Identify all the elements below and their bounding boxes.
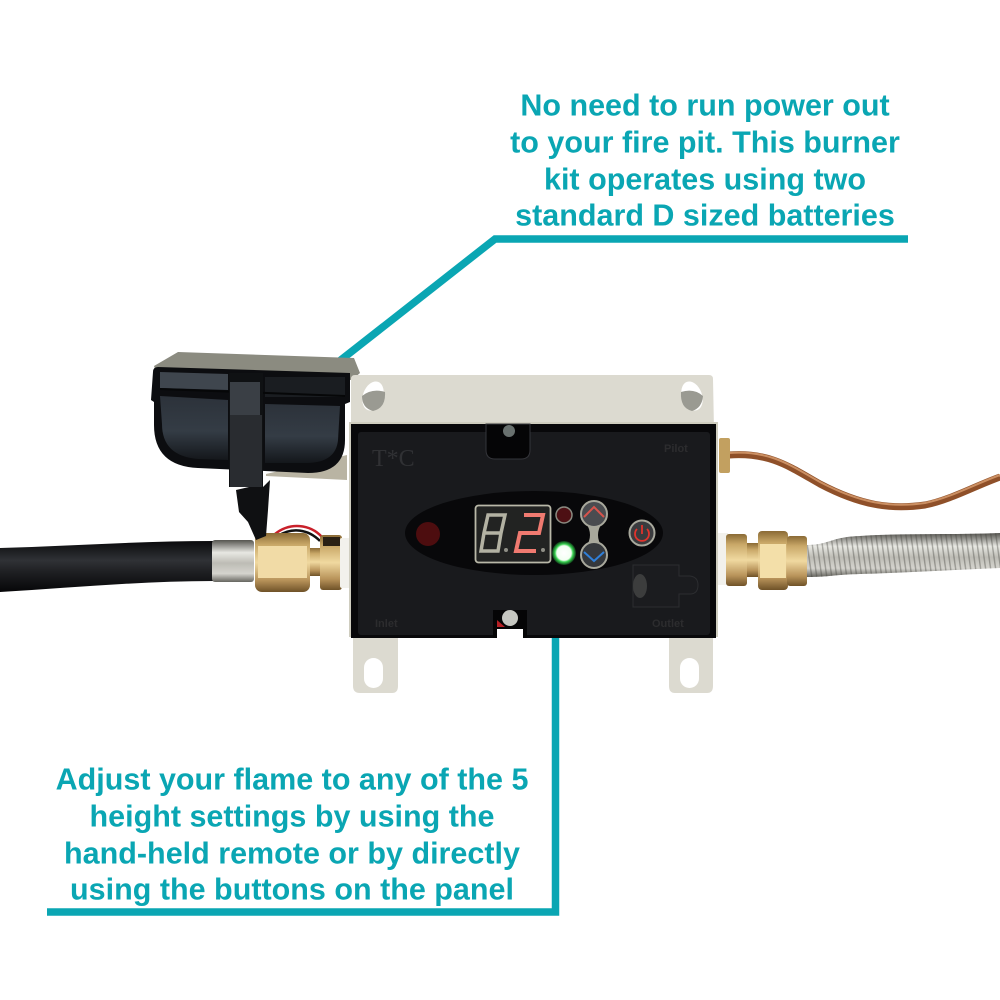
callout line: panel buttons xyxy=(47,638,556,912)
brass pilot fitting xyxy=(719,438,730,473)
text: panel buttons callout xyxy=(56,762,528,906)
mounting bracket xyxy=(351,375,714,693)
steel ferrule xyxy=(212,540,254,582)
flexible steel outlet hose xyxy=(806,533,1000,577)
up and down buttons xyxy=(581,501,607,568)
faint molded logo and labels xyxy=(372,443,688,630)
text: batteries callout: standard D sized batteries xyxy=(515,198,895,232)
green power LED xyxy=(552,541,576,565)
control oval xyxy=(405,491,663,575)
battery box strap xyxy=(229,373,263,487)
text: panel buttons callout: Adjust your flame to any of the 5 xyxy=(56,762,528,796)
callout line: batteries xyxy=(337,239,908,363)
faint molded logo and labels: T*C xyxy=(372,446,415,472)
brass outlet fitting xyxy=(718,531,807,590)
rubber gas hose xyxy=(0,541,214,592)
bracket holes xyxy=(358,378,707,688)
copper pilot tube xyxy=(729,453,1000,507)
faint molded logo and labels: Outlet xyxy=(652,618,684,630)
digital display xyxy=(476,506,550,562)
red sensor LED xyxy=(416,522,440,546)
text: batteries callout xyxy=(510,88,900,232)
text: panel buttons callout: using the buttons on the panel xyxy=(70,872,514,906)
red and black wires xyxy=(275,526,322,541)
digit 2 xyxy=(516,515,543,551)
small indicator LED xyxy=(556,507,572,523)
text: panel buttons callout: hand-held remote or by directly xyxy=(64,836,520,870)
power button xyxy=(630,520,654,546)
faint molded logo and labels: Inlet xyxy=(375,618,398,630)
faint molded logo and labels: Pilot xyxy=(664,443,688,455)
metal support under battery box xyxy=(266,455,347,480)
text: panel buttons callout: height settings by using the xyxy=(90,800,494,834)
wire connector below strap xyxy=(236,480,270,540)
brass inlet fitting xyxy=(255,533,352,592)
control panel housing xyxy=(349,422,718,639)
text: batteries callout: No need to run power out xyxy=(520,88,890,122)
plug cover xyxy=(633,565,698,607)
text: batteries callout: to your fire pit. This burner xyxy=(510,126,900,160)
text: batteries callout: kit operates using two xyxy=(544,162,866,196)
battery box xyxy=(151,352,360,473)
